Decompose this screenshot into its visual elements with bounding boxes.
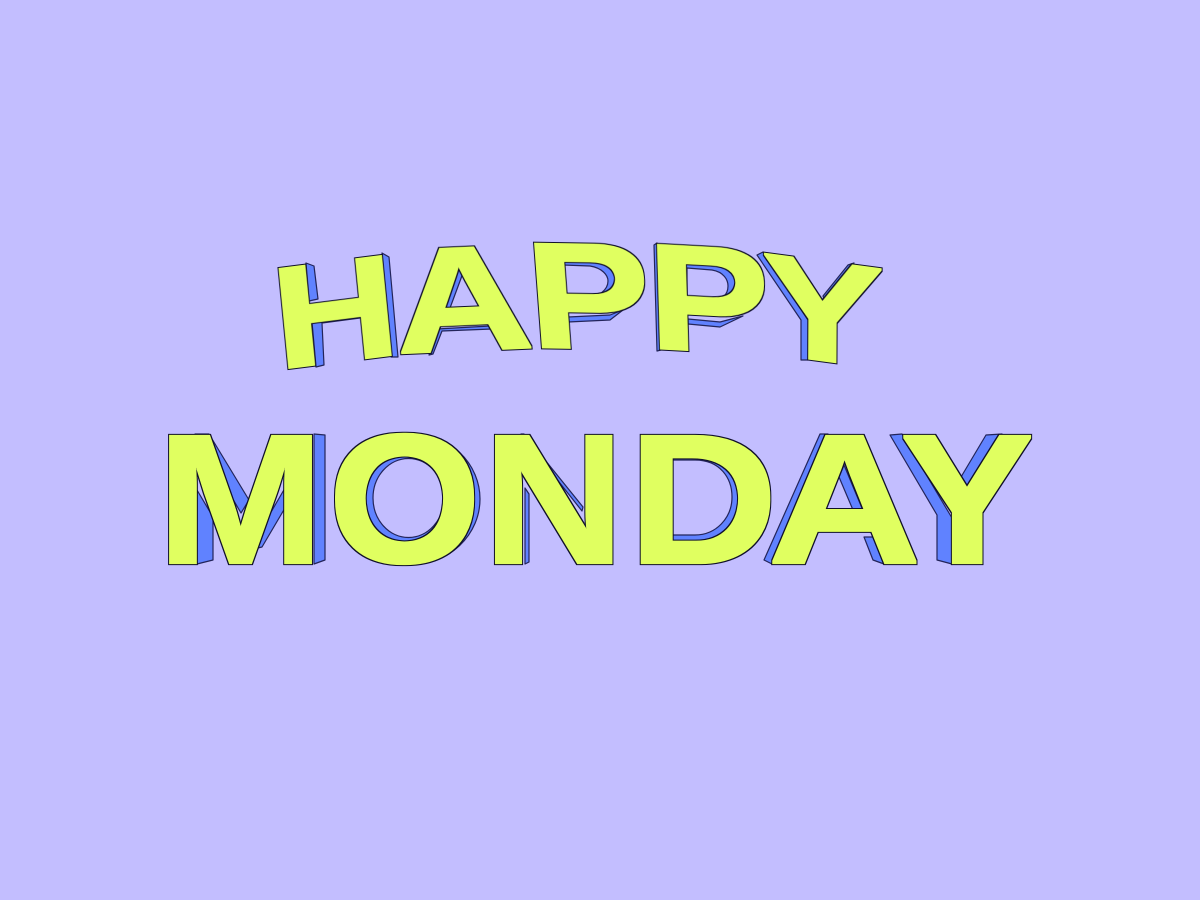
letter P: P [645, 212, 772, 387]
letter N: N [483, 398, 625, 602]
heading line: MONDAY [157, 396, 1034, 602]
letter M: M [157, 397, 324, 602]
letter Y: Y [761, 223, 884, 400]
heading line: HAPPY [265, 210, 884, 400]
letter A: A [768, 397, 921, 602]
letter O: O [328, 398, 481, 601]
letter H: H [265, 223, 405, 400]
letter P: P [520, 210, 657, 381]
letter A: A [384, 213, 539, 385]
letter D: D [628, 396, 778, 602]
letter Y: Y [901, 397, 1034, 602]
